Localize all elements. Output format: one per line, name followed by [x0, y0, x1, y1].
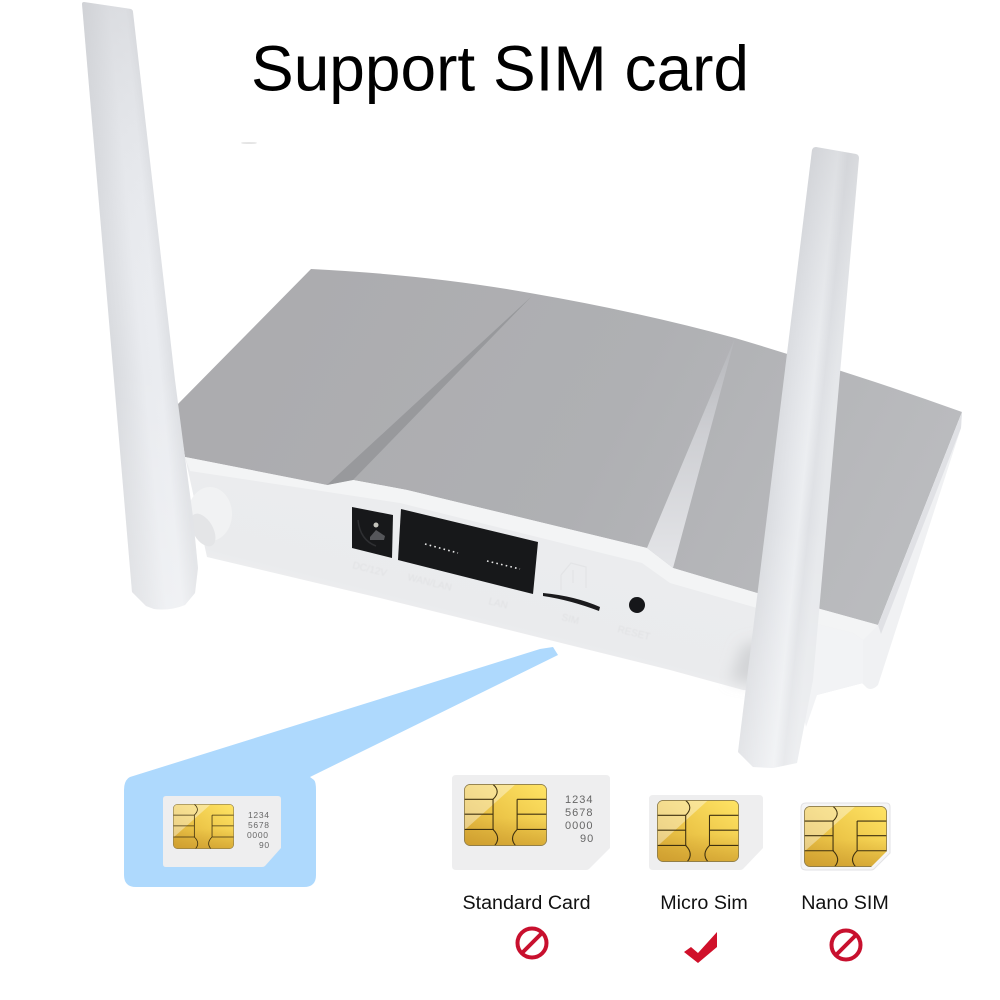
router top surface: [177, 269, 962, 625]
stray mark: [241, 142, 257, 144]
sim card: micro: [649, 795, 763, 870]
front lip highlight: [185, 457, 878, 640]
callout: SIM slot zoom: [124, 647, 558, 887]
label: standard card: Standard Card: [462, 892, 591, 914]
icon: not supported, standard card: [518, 928, 546, 958]
light roof ridge: [647, 338, 735, 568]
right antenna: [738, 147, 859, 768]
icon: ethernet ports: [398, 509, 538, 594]
icon: supported, micro sim: [684, 932, 717, 963]
sim card: standard: [452, 775, 610, 870]
port labels: RESET: [616, 624, 651, 643]
card digits: 90: [580, 833, 594, 845]
port labels: LAN: [487, 596, 509, 612]
title: Support SIM card: [251, 32, 749, 104]
card digits: 5678: [565, 807, 593, 819]
sim card: callout: [163, 796, 281, 867]
card digits: [247, 810, 270, 850]
port labels: DC/12V: [351, 560, 388, 579]
icon: reset hole: [629, 597, 645, 613]
card digits: 5678: [248, 820, 270, 830]
port labels: SIM: [560, 612, 580, 627]
card digits: 1234: [248, 810, 270, 820]
left antenna: [82, 2, 198, 610]
icon: SIM slot: [543, 593, 600, 611]
router front face: [185, 457, 878, 695]
rounded rear corner: [878, 412, 962, 634]
router right side wall: [862, 412, 962, 689]
right antenna recess: [800, 623, 863, 727]
port labels: WAN/LAN: [406, 572, 453, 594]
card digits: 90: [259, 840, 270, 850]
card digits: 0000: [565, 820, 593, 832]
gold chip: [657, 800, 739, 862]
router: [177, 269, 962, 727]
label: micro sim: Micro Sim: [660, 892, 748, 914]
gold chip: [464, 784, 547, 846]
left antenna mount: [185, 487, 232, 551]
card digits: 0000: [247, 830, 269, 840]
label: nano sim: Nano SIM: [801, 892, 889, 914]
port labels: [351, 560, 651, 643]
sim card: nano: [801, 803, 890, 870]
card digits: 1234: [565, 794, 593, 806]
dark roof ridge: [327, 296, 532, 485]
gold chip: [173, 804, 234, 849]
icon: power jack: [352, 507, 393, 558]
icon: SIM arrow mark: [561, 563, 586, 590]
shadow beside right antenna: [730, 640, 768, 685]
gold chip: [804, 806, 887, 867]
icon: not supported, nano sim: [832, 930, 860, 960]
card digits: [565, 794, 594, 845]
